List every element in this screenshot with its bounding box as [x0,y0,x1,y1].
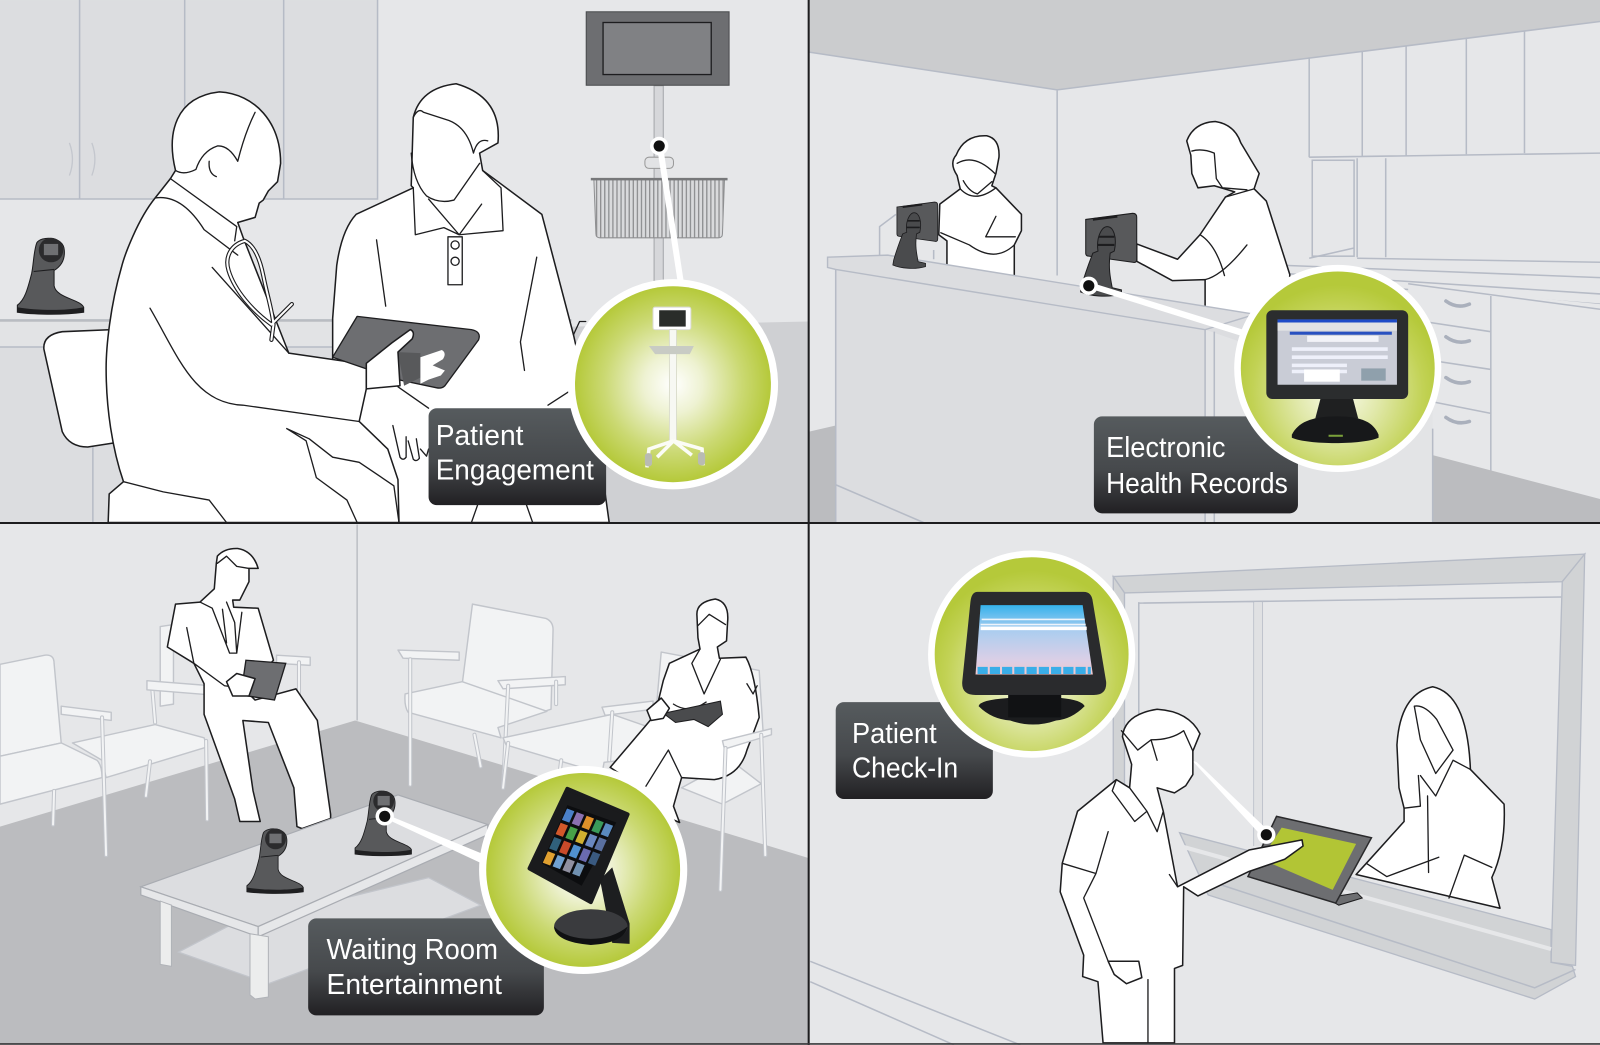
chair right arm front [720,729,771,890]
label: patient engagement: Engagement [436,455,594,487]
tablet mount left [247,828,303,893]
panel: electronic health records [809,0,1600,522]
callout circle: kiosk [928,551,1135,758]
room: cabinets, counter and floor [0,0,808,522]
seated man with tablet [167,548,331,829]
nurse behind window [1356,687,1504,908]
label: check-in: Check-In [852,753,958,785]
tablet mount on counter [17,238,84,314]
callout circle: tablet with apps [479,766,687,974]
label: patient engagement: Patient [436,420,524,452]
pointer dot [1080,277,1098,295]
window frame [1113,554,1585,999]
connector: engagement [657,148,685,288]
monitor back left [893,202,938,268]
stethoscope [227,241,292,340]
back-counter card [880,214,934,259]
customer [1060,709,1303,1043]
label: check-in [836,702,993,799]
callout circle: desktop monitor [1234,265,1441,472]
chairs left [0,625,310,855]
label: waiting room: Waiting Room [327,934,498,966]
label: waiting room [308,918,544,1015]
connector: entertainment [384,813,486,863]
connector: records [1088,282,1253,339]
patient [333,84,609,522]
pointer dot [376,807,394,826]
panel: patient engagement [0,0,808,522]
doctor [106,92,399,522]
floor lines [810,961,1020,1045]
pointer dot [1257,826,1276,844]
tablet on sill [1248,816,1371,905]
label: waiting room: Entertainment [327,969,502,1001]
app icons [543,808,613,880]
label: health records: Electronic [1106,432,1226,464]
panel: waiting room entertainment [0,525,809,1045]
monitor back right [1081,213,1137,296]
pointer dot [650,137,668,155]
receptionist right [1137,121,1290,316]
desk [828,255,1433,522]
tablet held in hands [333,316,479,389]
seated woman with tablet [610,599,759,822]
tablet mount right [355,791,411,856]
chair right [503,652,763,804]
panel: patient check-in [810,551,1585,1045]
connector: check-in [1192,760,1269,837]
label: health records: Health Records [1106,468,1288,500]
callout circle: cart [568,279,778,489]
coffee table [141,795,488,999]
chair center [398,604,565,788]
room: floor and wall corner [0,525,809,1045]
label: health records [1094,416,1298,513]
chair [44,330,114,447]
label: check-in: Patient [852,718,937,750]
display and pole [586,12,729,282]
room: ceiling, walls, cabinets, floor [809,0,1600,522]
basket [591,179,728,238]
receptionist left [939,136,1021,281]
label: patient engagement [429,408,606,505]
